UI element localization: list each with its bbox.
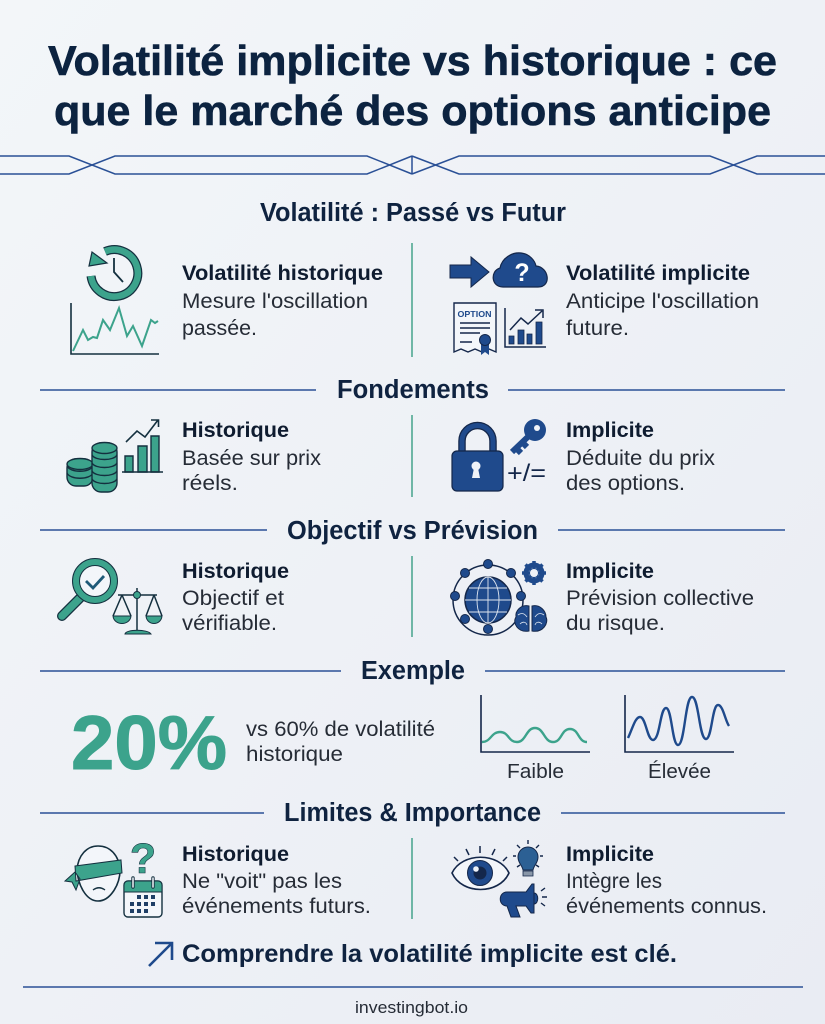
text: historique basée sur prix réels: Basée sur prix (182, 446, 321, 470)
text: implicite intègre les événements connus: événements connus. (566, 894, 767, 918)
text: historique basée sur prix réels (182, 419, 321, 495)
text: implicite déduite du prix des options (566, 419, 715, 495)
text: implicite déduite du prix des options: Implicite (566, 419, 654, 442)
arrow: conclusion (149, 943, 172, 966)
icon: arrow, cloud, option contract and bar chart (450, 253, 547, 355)
icon: eye, light bulb and megaphone (452, 840, 547, 917)
text: implicite intègre les événements connus: Implicite (566, 843, 654, 866)
title (48, 37, 777, 134)
heading: Fondements: Fondements (337, 376, 489, 404)
icon: blindfolded face, question mark and calendar: ? (130, 835, 156, 883)
big number: 20%: 20% (71, 701, 227, 786)
conclusion text: Comprendre la volatilité implicite est clé. (182, 940, 677, 968)
chart: faible volatility (481, 695, 590, 783)
text: volatilité historique: Volatilité historique (182, 262, 383, 285)
text: implicite prévision collective du risque: Implicite (566, 560, 654, 583)
heading: Limites et Importance: Limites & Importance (284, 799, 541, 827)
icon: network globe, gear and brain (450, 560, 547, 635)
text: volatilité implicite (566, 262, 759, 340)
icon: magnifying glass and scales (62, 562, 162, 634)
chart: élevée volatility (625, 695, 734, 783)
text: historique objectif et vérifiable: Objectif et (182, 586, 284, 610)
text: historique objectif et vérifiable: Historique (182, 560, 289, 583)
heading: Objectif vs Prévision: Objectif vs Prévision (287, 517, 538, 545)
icon: padlock, key and symbols: +/= (507, 460, 546, 487)
text: historique ne voit pas: Ne "voit" pas les (182, 869, 342, 893)
text: implicite déduite du prix des options: des options. (566, 471, 685, 495)
text: historique objectif et vérifiable: vérifiable. (182, 611, 277, 635)
text: implicite prévision collective du risque: du risque. (566, 611, 665, 635)
text: historique ne voit pas (182, 843, 371, 918)
text: historique basée sur prix réels: réels. (182, 471, 238, 495)
text: volatilité implicite: Anticipe l'oscillation (566, 289, 759, 313)
icon: padlock, key and symbols (452, 419, 546, 491)
text: historique basée sur prix réels: Historique (182, 419, 289, 442)
footer: investingbot.io (355, 999, 468, 1017)
text: vs 60% de volatilité historique (246, 717, 435, 766)
text: volatilité implicite: Volatilité implicite (566, 262, 750, 285)
title: Volatilité implicite vs historique : ce (48, 37, 777, 84)
text: implicite prévision collective du risque (566, 560, 754, 635)
icon: blindfolded face, question mark and calendar (65, 835, 162, 917)
text: historique ne voit pas: événements futurs. (182, 894, 371, 918)
chart: élevée volatility: Élevée (648, 760, 711, 783)
icon: arrow, cloud, option contract and bar chart: ? (514, 259, 530, 287)
text: vs 60% de volatilité historique: vs 60% de volatilité (246, 717, 435, 741)
text: historique objectif et vérifiable (182, 560, 289, 635)
text: vs 60% de volatilité historique: historique (246, 742, 343, 766)
icon: coin stacks and rising bars (67, 420, 163, 492)
text: implicite intègre les événements connus: Intègre les (566, 869, 662, 893)
heading: Exemple: Exemple (361, 657, 465, 685)
text: volatilité implicite: future. (566, 316, 629, 340)
text: implicite prévision collective du risque: Prévision collective (566, 586, 754, 610)
text: volatilité historique (182, 262, 383, 340)
title: que le marché des options anticipe (54, 87, 771, 134)
text: volatilité historique: Mesure l'oscillation (182, 289, 368, 313)
text: historique ne voit pas: Historique (182, 843, 289, 866)
text: implicite déduite du prix des options: Déduite du prix (566, 446, 715, 470)
text: volatilité historique: passée. (182, 316, 257, 340)
text: implicite intègre les événements connus (566, 843, 767, 918)
icon: clock with history arrow and line chart (71, 250, 159, 354)
icon: arrow, cloud, option contract and bar chart: OPTION (458, 309, 492, 319)
chart: faible volatility: Faible (507, 760, 564, 783)
heading: Volatilité Passé vs Futur: Volatilité : Passé vs Futur (260, 199, 566, 227)
